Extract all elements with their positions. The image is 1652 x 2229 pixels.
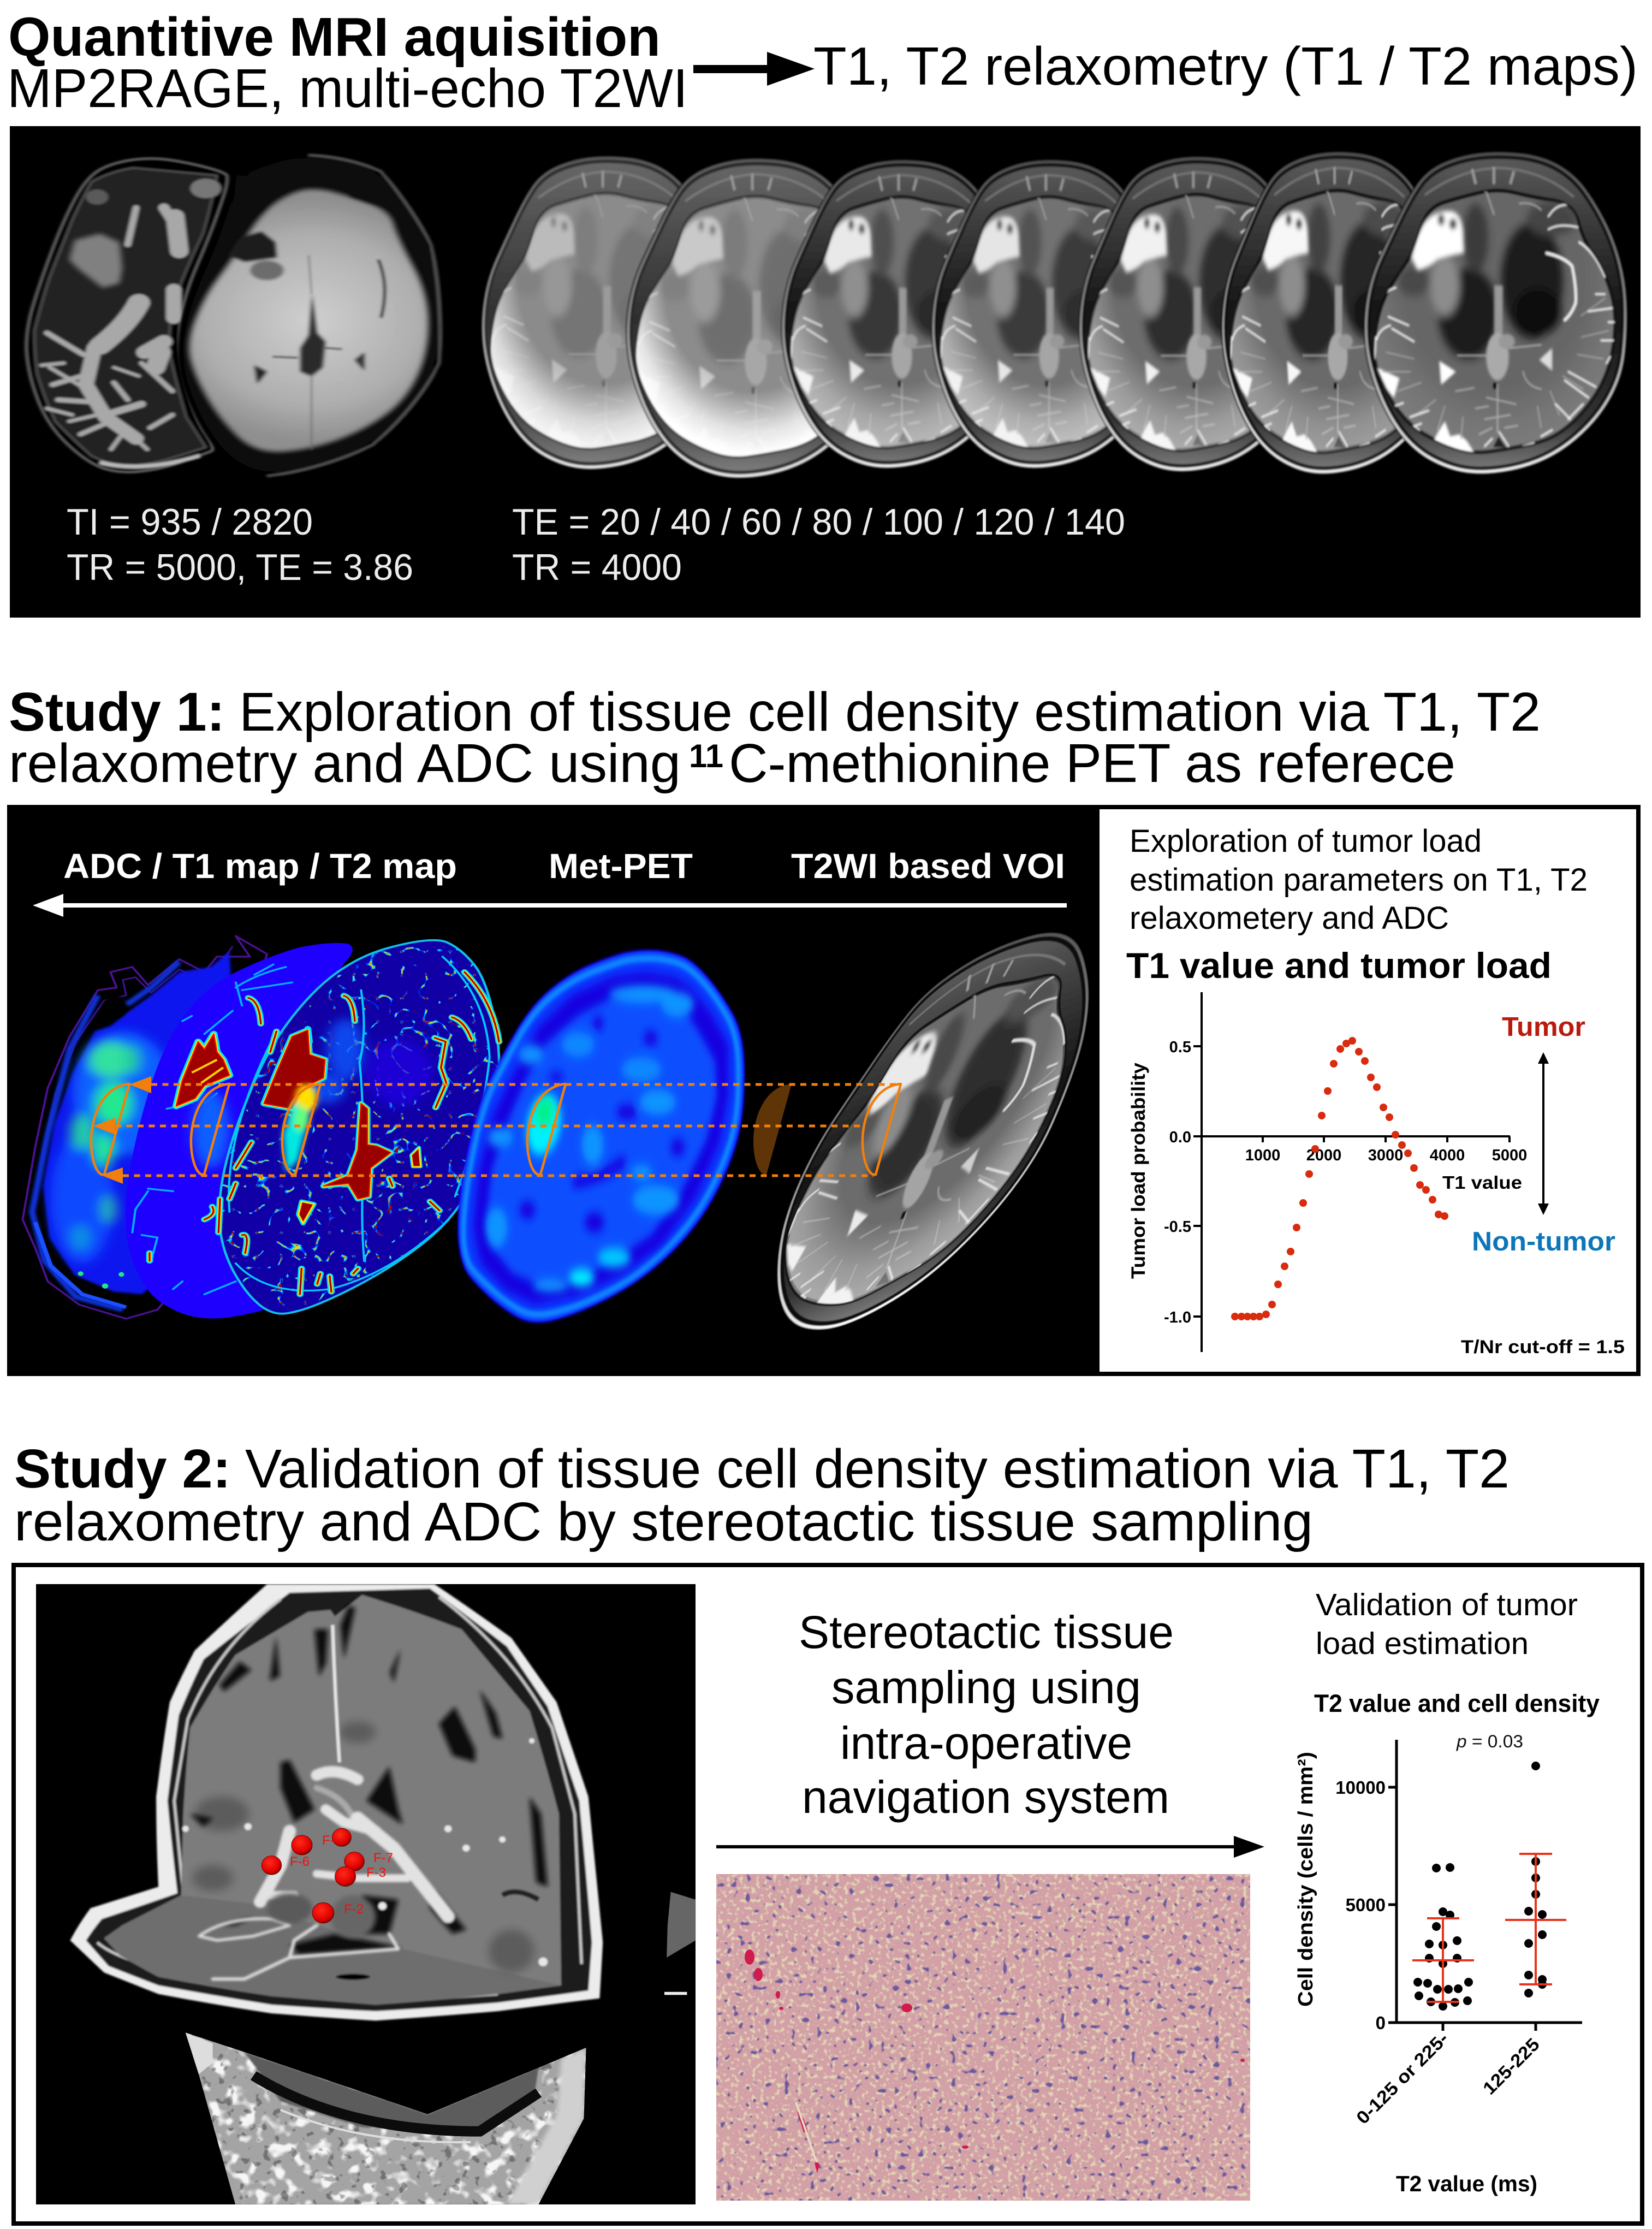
T2WI with VOI [732, 893, 1137, 1368]
sampling point labels: F-3 [366, 1865, 386, 1880]
label: Non-tumor: Non-tumor [1472, 1227, 1615, 1256]
scatter chart: T2 value and cell density: 5000 [1346, 1895, 1386, 1915]
MP2RAGE parameters: TI = 935 / 2820 [67, 501, 313, 543]
scatter chart: T1 value vs tumor load probability: 0.0 [1169, 1129, 1191, 1146]
double-headed arrow [1538, 1052, 1549, 1215]
scatter chart: T2 value and cell density: 125-225 [1479, 2034, 1543, 2098]
heading: T1, T2 relaxometry: T1, T2 relaxometry (T1 / T2 maps) [813, 36, 1638, 96]
scatter chart: T1 value vs tumor load probability [1128, 992, 1527, 1352]
chart title: T2 value and cell density [1314, 1689, 1600, 1717]
sampling point labels: F- [322, 1833, 335, 1848]
heading: Study 2: relaxometry and ADC by stereotactic tissue sampling [14, 1491, 1313, 1552]
title: Quantitive MRI aquisition [7, 7, 688, 119]
panel: multimodal imaging stack [7, 805, 1137, 1376]
arrow: white direction arrow [33, 894, 1067, 917]
scatter chart: T1 value vs tumor load probability: Tumor load probability [1128, 1062, 1149, 1279]
scatter chart: T1 value vs tumor load probability: -1.0 [1164, 1309, 1191, 1326]
MRI image: MP2RAGE inversion 2 [181, 155, 441, 476]
brown VOI disc [753, 1084, 792, 1175]
sampling points [262, 1828, 364, 1923]
chart title: T1 value and tumor load [1126, 945, 1552, 986]
sampling point labels: F-7 [373, 1851, 393, 1865]
MP2RAGE parameters: TR = 5000, TE = 3.86 [67, 547, 413, 588]
arrow: acquisition to relaxometry [693, 52, 815, 86]
orange dashed projection arrows [93, 1076, 901, 1184]
panel description: relaxometery and ADC [1130, 900, 1449, 936]
Met-PET map [459, 951, 744, 1321]
sampling point labels: F-6 [290, 1854, 310, 1869]
histology image [716, 1874, 1250, 2201]
neck section [181, 2029, 593, 2209]
heading: Study 1: C-methionine PET as referece [729, 733, 1455, 794]
MP2RAGE parameters [67, 501, 413, 588]
text: validation of tumor load estimation [1316, 1587, 1578, 1661]
heading: Study 2 [14, 1438, 1510, 1552]
column labels: Met-PET [549, 846, 693, 886]
title: Quantitive MRI aquisition: Quantitive MRI aquisition [8, 7, 661, 68]
heading: Study 1: Study 1: [9, 681, 225, 743]
panel: tumor load exploration chart [1097, 807, 1638, 1374]
text: stereotactic tissue sampling: sampling using [831, 1662, 1141, 1713]
orange VOI outlines [91, 1084, 901, 1175]
panel description: estimation parameters on T1, T2 [1130, 862, 1588, 898]
ADC map [22, 936, 267, 1319]
arrow: to histology [716, 1836, 1264, 1858]
scatter chart: T1 value vs tumor load probability: 3000 [1368, 1147, 1403, 1164]
column labels: T2WI based VOI [791, 846, 1065, 886]
text: stereotactic tissue sampling: Stereotactic tissue [799, 1606, 1174, 1658]
sampling point labels [290, 1833, 393, 1917]
label: Tumor: Tumor [1502, 1012, 1585, 1042]
MRI image series: multi-echo T2WI [483, 154, 1625, 476]
scatter chart: T2 value and cell density: 10000 [1335, 1777, 1386, 1798]
cut-off note: T/Nr cut-off = 1.5 [1461, 1337, 1625, 1357]
scatter chart: T1 value vs tumor load probability: 4000 [1430, 1147, 1465, 1164]
panel: stereotactic validation frame [14, 1565, 1642, 2224]
sampling point labels: F-2 [344, 1902, 364, 1917]
heading: Study 2: Study 2: [14, 1438, 231, 1499]
MRI image: coronal navigation with sampling points [36, 1584, 696, 2209]
scatter chart: T2 value and cell density: 0 [1376, 2013, 1386, 2033]
panel description: Exploration of tumor load [1130, 823, 1482, 859]
scatter chart: T1 value vs tumor load probability: T1 value [1442, 1172, 1522, 1193]
T2 map [150, 933, 508, 1320]
scatter chart: T1 value vs tumor load probability: 1000 [1245, 1147, 1280, 1164]
title: Quantitive MRI aquisition: MP2RAGE, multi-echo T2WI [7, 58, 688, 119]
heading: Study 2: Validation of tissue cell density estimation via T1, T2 [245, 1438, 1510, 1499]
T2WI parameters: TE = 20 / 40 / 60 / 80 / 100 / 120 / 140 [512, 501, 1125, 543]
column labels: ADC / T1 map / T2 map [63, 846, 457, 886]
scatter chart: T1 value vs tumor load probability: -0.5 [1164, 1218, 1191, 1236]
text: validation of tumor load estimation: Validation of tumor [1316, 1587, 1578, 1622]
scatter chart: T2 value and cell density: Cell density (cells / mm²) [1294, 1752, 1317, 2007]
T1 map [126, 943, 353, 1319]
panel description [1130, 823, 1588, 936]
T1 map: high signal patch [176, 1034, 229, 1106]
axis label: T2 value: T2 value (ms) [1396, 2171, 1537, 2196]
column labels [63, 846, 1065, 886]
scatter chart: T2 value and cell density [1294, 1732, 1582, 2128]
heading: Study 1: Exploration of tissue cell density estimation via T1, T2 [239, 681, 1541, 743]
panel: MRI acquisition images [10, 126, 1641, 618]
head section [70, 1584, 603, 2020]
heading: Study 1 [9, 681, 1541, 794]
text: stereotactic tissue sampling: navigation system [802, 1771, 1169, 1823]
text: validation of tumor load estimation: load estimation [1316, 1626, 1529, 1661]
text: stereotactic tissue sampling: intra-operative [840, 1717, 1132, 1769]
heading: Study 1: relaxometry and ADC using [9, 733, 681, 794]
heading: Study 1: 11 [689, 738, 723, 774]
side fragment [664, 1892, 696, 1995]
scatter chart: T2 value and cell density: 0-125 or 225- [1352, 2028, 1452, 2128]
T2WI parameters [512, 501, 1125, 588]
scatter chart: T1 value vs tumor load probability: 0.5 [1169, 1039, 1191, 1056]
scatter chart: T1 value vs tumor load probability: 5000 [1492, 1147, 1527, 1164]
MRI image: MP2RAGE inversion 1 [26, 158, 228, 472]
scatter chart: T1 value vs tumor load probability: 2000 [1306, 1147, 1341, 1164]
T2WI parameters: TR = 4000 [512, 547, 682, 588]
scatter chart: T2 value and cell density: p = 0.03 [1456, 1732, 1523, 1751]
text: stereotactic tissue sampling [799, 1606, 1174, 1823]
